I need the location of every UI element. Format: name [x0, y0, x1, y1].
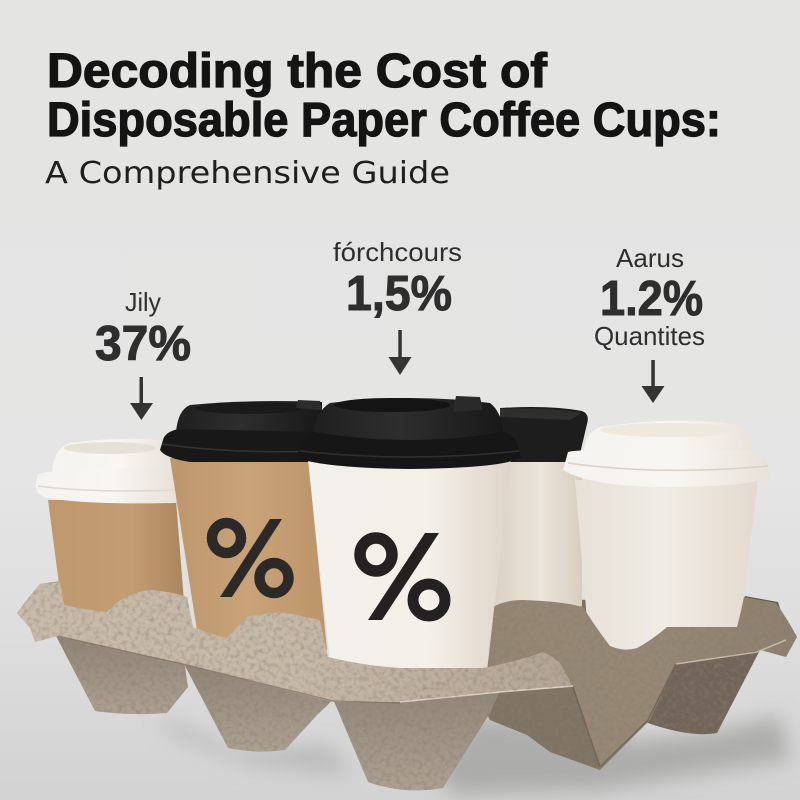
arrow: forchcours: [388, 330, 412, 375]
title: Disposable Paper Coffee Cups:: [47, 94, 721, 147]
title: [45, 45, 721, 191]
label: Aarus 1.2% Quantites: [594, 243, 705, 351]
lid: black, kraft cup: [160, 400, 322, 462]
icon: percent sign on centre cup: [360, 533, 445, 620]
label: Aarus 1.2% Quantites: Aarus: [616, 243, 684, 273]
tray shadow: [160, 715, 790, 795]
label: forchcours 1,5%: fórchcours: [333, 237, 462, 267]
label: Aarus 1.2% Quantites: Quantites: [594, 321, 705, 351]
lid: black, centre cup: [297, 396, 521, 469]
label: forchcours 1,5%: [333, 237, 462, 321]
title: A Comprehensive Guide: [45, 156, 450, 191]
label: Jily 37%: 37%: [95, 317, 191, 371]
arrow: Jily: [130, 377, 153, 420]
label: Jily 37%: [95, 287, 191, 371]
cup: back left, kraft with white lid: [36, 439, 187, 640]
tray: right section: [478, 597, 797, 769]
tray: back sockets: [17, 581, 790, 670]
cup: centre white with percent symbol: [297, 396, 521, 680]
label: Aarus 1.2% Quantites: 1.2%: [600, 272, 703, 326]
arrow: Aarus: [642, 360, 664, 403]
cup: front right, white with white lid: [563, 421, 770, 655]
cup: back right, white with black lid: [480, 407, 588, 640]
label: forchcours 1,5%: 1,5%: [346, 267, 452, 321]
cup: kraft with percent symbol: [160, 400, 327, 650]
label: Jily 37%: Jily: [125, 287, 161, 317]
tray: moulded pulp legs: [56, 636, 760, 790]
icon: percent sign on kraft cup: [212, 519, 288, 597]
title: Decoding the Cost of: [47, 45, 548, 98]
tray: left front section: [17, 582, 786, 767]
